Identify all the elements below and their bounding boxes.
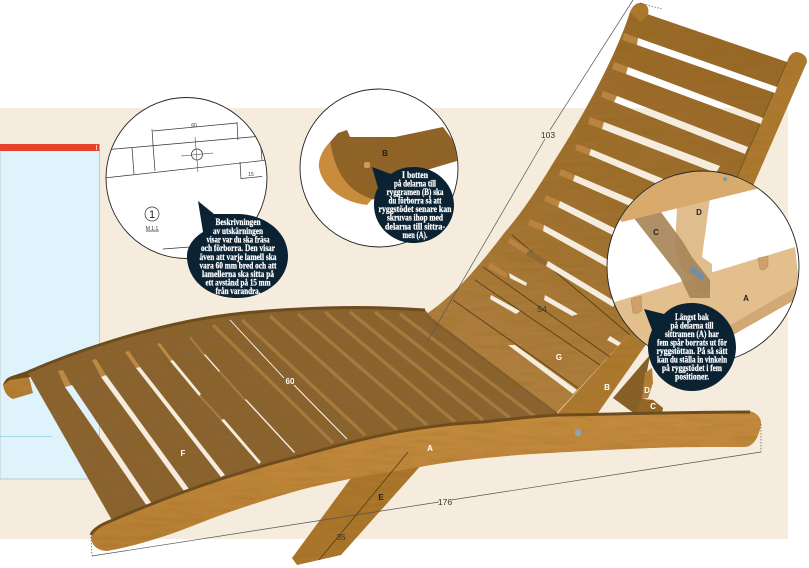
callout: cutouts	[187, 201, 288, 298]
seat top rail	[28, 308, 425, 372]
callout: pre-drilling	[372, 167, 454, 243]
callout: cutouts: ett avstånd på 15 mm	[206, 278, 271, 288]
callout: pre-drilling: delarna till sittra-	[385, 222, 445, 232]
dimension and part labels: 103	[541, 130, 555, 140]
callout: grooves: fem spår borrats ut för	[657, 338, 727, 348]
detail circle: slots in seat frame: C	[653, 228, 659, 237]
detail circle: back frame bottom	[300, 89, 460, 247]
bolt	[575, 429, 581, 436]
callout: grooves: sittramen (A) har	[665, 329, 719, 339]
detail: bolt	[689, 266, 705, 281]
detail circle: slots in seat frame: A	[743, 294, 749, 303]
callout: pre-drilling: du förborra så att	[388, 196, 442, 206]
callout: cutouts: från varandra.	[216, 286, 260, 296]
dimension and part labels: D	[644, 386, 650, 395]
dimension and part labels: A	[427, 444, 433, 453]
callout: cutouts: lamellerna ska sitta på	[202, 269, 274, 279]
back rest right frame B	[557, 52, 807, 414]
callout: grooves: Längst bak	[675, 312, 709, 322]
detail circle: back frame bottom: B	[382, 149, 388, 158]
callout: grooves: på delarna till	[670, 320, 714, 330]
dimension and part labels: E	[378, 493, 384, 502]
detail: top beam	[620, 172, 758, 222]
detail: leg C	[633, 208, 710, 298]
callout: cutouts: av utskärningen	[213, 226, 263, 236]
dimension and part labels: 60	[286, 377, 295, 386]
callout: pre-drilling: men (A).	[402, 230, 428, 240]
dimension and part labels: 35	[336, 532, 346, 542]
chair: seat slats	[28, 308, 557, 522]
callout: grooves: på ryggstödet i fem	[662, 363, 722, 373]
chair: leg E	[292, 462, 424, 565]
callout: cutouts: vara 60 mm bred och att	[200, 260, 276, 270]
chair: left foot of rail	[3, 370, 33, 399]
back rest top post	[630, 3, 648, 22]
back board lower edge shade	[425, 315, 557, 413]
detail circle: drawing: 1	[149, 209, 155, 221]
detail circle: drawing: M 1:1	[146, 226, 158, 232]
detail circle: drawing	[104, 98, 268, 258]
chair: back rest with slats	[425, 3, 807, 414]
dimension and part labels: C	[650, 402, 656, 411]
callout: grooves: kan du ställa in vinkeln	[657, 354, 727, 364]
dimension and part labels: B	[604, 383, 610, 392]
callout: grooves	[644, 303, 736, 391]
dimension and part labels: 54	[537, 304, 547, 314]
detail circle: slots in seat frame	[600, 165, 800, 363]
small bolt on back frame	[723, 177, 727, 181]
dimension and part labels: 176	[438, 497, 452, 507]
callout: cutouts: även att varje lamell ska	[200, 252, 277, 262]
callout: pre-drilling: skruvas ihop med	[387, 212, 443, 222]
dimension and part labels	[181, 130, 656, 542]
callout: grooves: positioner.	[675, 372, 709, 382]
detail: leg D	[675, 198, 712, 283]
detail circle: drawing: 15	[248, 172, 254, 178]
chair: rear support pieces C and D	[613, 355, 663, 414]
blue side panel	[0, 144, 100, 479]
callout: grooves: ryggstöttan. På så sätt	[656, 346, 728, 356]
callout: pre-drilling: ryggstödet senare kan	[378, 204, 452, 214]
back rest slat surface	[425, 12, 787, 413]
callout: pre-drilling: I botten	[402, 170, 428, 180]
detail circle: slots in seat frame: D	[696, 208, 702, 217]
callout: pre-drilling: ryggramen (B) ska	[386, 187, 444, 197]
callout: cutouts: och förborra. Den visar	[201, 243, 275, 253]
dimension and part labels: G	[556, 353, 562, 362]
dimension and part labels: F	[181, 449, 186, 458]
page background panel	[0, 108, 788, 539]
callout: cutouts: Beskrivningen	[216, 217, 260, 227]
callout: pre-drilling: på delarna till	[394, 178, 436, 188]
chair: side frame A	[91, 411, 761, 551]
detail: slots	[631, 256, 768, 314]
detail circle: drawing: 60	[191, 123, 197, 129]
detail: beam A	[614, 247, 798, 345]
callout: cutouts: visar var du ska fräsa	[206, 234, 270, 244]
